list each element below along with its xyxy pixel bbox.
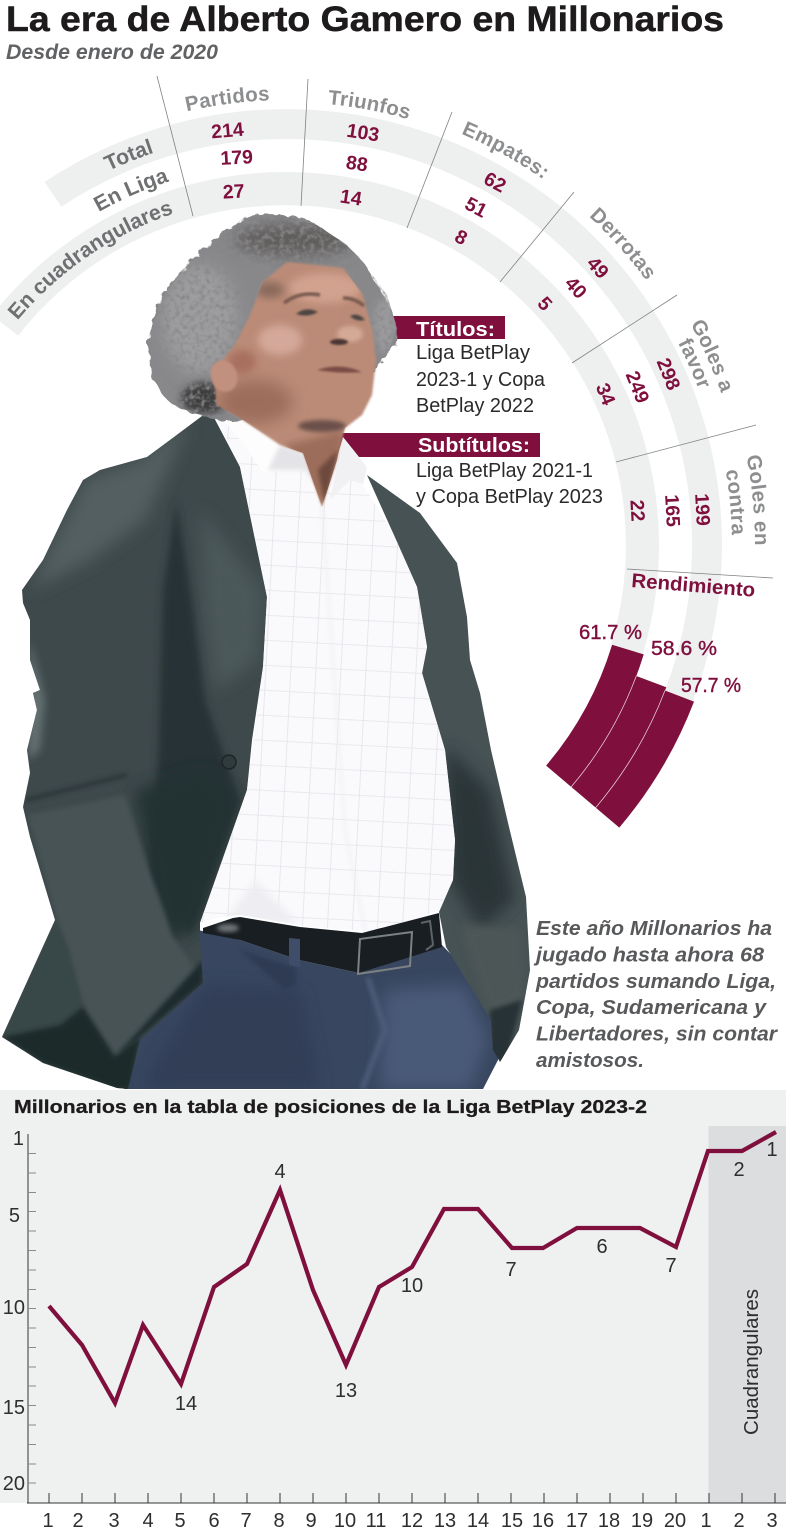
x axis labels: 13 (434, 1510, 456, 1532)
note: season matches: Libertadores, sin contar (536, 1024, 778, 1046)
values: Partidos: 179 (220, 146, 254, 170)
point labels: 6 (596, 1236, 608, 1258)
jacket: left side (0, 405, 270, 1095)
face (206, 262, 376, 507)
x axis with ticks (27, 1493, 786, 1503)
note: season matches: jugado hasta ahora 68 (533, 944, 765, 966)
x axis labels: 18 (598, 1510, 620, 1532)
x axis labels: 11 (366, 1510, 386, 1532)
x axis labels: 19 (631, 1510, 653, 1532)
heading: Títulos: Títulos: (416, 319, 495, 341)
bar: 61.7 % (546, 645, 644, 787)
point labels: 1 (766, 1139, 778, 1161)
value: 61.7 %: 61.7 % (579, 622, 642, 644)
value: 57.7 %: 57.7 % (681, 675, 741, 697)
text: titles list: BetPlay 2022 (416, 395, 534, 417)
column label: Partidos: Partidos (185, 87, 269, 111)
text: titles list: Liga BetPlay (416, 342, 530, 364)
x axis labels: 1 (700, 1510, 712, 1532)
values: Derrotas: 49 (582, 253, 613, 284)
x axis labels: 7 (240, 1510, 252, 1532)
x axis labels: 15 (501, 1510, 523, 1532)
note: season matches: Copa, Sudamericana y (536, 997, 767, 1019)
values: Triunfos: 88 (345, 152, 369, 176)
x axis labels: 10 (334, 1510, 356, 1532)
note: season matches (533, 918, 778, 1072)
position line (49, 1132, 776, 1403)
value: 58.6 %: 58.6 % (651, 638, 717, 660)
x axis labels: 1 (42, 1510, 54, 1532)
text: titles list (416, 342, 546, 417)
column label: Goles en contra: Goles en (748, 455, 766, 544)
titles heading bar (385, 316, 505, 339)
radial stats table (0, 76, 773, 838)
row label: Total: Total (102, 138, 153, 169)
values: Triunfos (338, 120, 381, 211)
y axis labels: 20 (3, 1473, 25, 1495)
x axis labels: 14 (467, 1510, 489, 1532)
panel: league position chart (0, 1090, 786, 1532)
x axis labels: 8 (273, 1510, 285, 1532)
nose (337, 326, 363, 342)
values: Goles en contra (625, 493, 714, 528)
row label: En Liga: En Liga (93, 172, 170, 212)
chart heading: Millonarios en la tabla de posiciones de la Liga BetPlay 2023-2 (14, 1096, 647, 1117)
point labels (175, 1139, 778, 1415)
y axis with ticks (28, 1134, 36, 1503)
x axis labels: 2 (72, 1510, 84, 1532)
subtitles block (416, 435, 603, 508)
ear (206, 357, 242, 395)
column label: Goles a favor: Goles a (693, 320, 730, 393)
values: Goles a favor: 249 (621, 368, 653, 407)
title: La era de Alberto Gamero en Millonarios (6, 0, 724, 39)
values: Derrotas (533, 253, 613, 315)
text: subtitles list: Liga BetPlay 2021-1 (416, 460, 593, 482)
text: subtitles list (416, 460, 603, 508)
belt (203, 913, 442, 974)
column label: Triunfos: Triunfos (329, 90, 410, 118)
chart background (0, 1090, 786, 1503)
point labels: 10 (401, 1275, 423, 1297)
x axis labels: 16 (532, 1510, 554, 1532)
text: titles list: 2023-1 y Copa (416, 369, 546, 391)
point labels: 2 (733, 1159, 745, 1181)
x axis labels: 3 (766, 1510, 778, 1532)
values: Empates: 8 (451, 225, 471, 250)
point labels: 13 (335, 1380, 357, 1402)
column label: Derrotas: Derrotas (590, 207, 654, 279)
column label: Goles en contra (726, 455, 766, 544)
x axis labels: 9 (305, 1510, 317, 1532)
note: season matches: partidos sumando Liga, (535, 971, 776, 993)
subtitle: Desde enero de 2020 (6, 40, 218, 64)
bar: 58.6 % (571, 676, 666, 808)
values: Empates: 51 (461, 193, 491, 223)
values: Goles a favor: 298 (652, 355, 684, 394)
titles block (416, 319, 546, 417)
x axis labels: 17 (566, 1510, 588, 1532)
x axis labels: 20 (664, 1510, 686, 1532)
values: Partidos: 27 (222, 180, 245, 204)
x axis labels: 12 (401, 1510, 423, 1532)
values: Goles a favor: 34 (591, 380, 619, 409)
eyes (296, 309, 365, 320)
y axis labels: 10 (3, 1297, 25, 1319)
point labels: 4 (274, 1161, 286, 1183)
column dividers (157, 76, 773, 578)
values: Empates (451, 168, 510, 250)
y axis labels: 1 (13, 1128, 24, 1150)
shirt (195, 405, 460, 940)
values: Goles a favor (591, 355, 684, 409)
y axis labels (3, 1128, 25, 1495)
values: Triunfos: 14 (338, 186, 364, 211)
bar: 57.7 % (596, 690, 694, 828)
column label: Goles en contra: contra (726, 470, 744, 536)
values: Goles en contra: 22 (625, 499, 649, 522)
eyebrows (284, 294, 364, 306)
column label: Goles a favor: favor (678, 338, 709, 386)
cuadrangulares shaded area (708, 1126, 786, 1503)
pants (124, 930, 498, 1089)
values: Empates: 62 (480, 168, 510, 198)
values: Triunfos: 103 (345, 120, 381, 147)
x axis labels: 3 (108, 1510, 120, 1532)
inner band: en cuadrangulares (0, 172, 659, 654)
x axis labels (42, 1510, 778, 1532)
y axis labels: 5 (9, 1205, 20, 1227)
note: season matches: amistosos. (536, 1050, 644, 1072)
row label: En cuadrangulares: En cuadrangulares (7, 204, 172, 320)
mouth (317, 366, 362, 373)
point labels: 7 (505, 1259, 517, 1281)
note: season matches: Este año Millonarios ha (536, 918, 772, 940)
subtitles heading bar (335, 433, 540, 457)
outer band: total (45, 109, 722, 701)
values: Partidos (210, 119, 254, 204)
x axis labels: 6 (208, 1510, 220, 1532)
heading: Subtítulos: Subtítulos: (418, 435, 530, 457)
values: Goles en contra: 199 (690, 493, 714, 527)
hair (140, 210, 405, 425)
photo: Alberto Gamero (0, 210, 535, 1095)
column label: Goles a favor (678, 320, 730, 393)
text: subtitles list: y Copa BetPlay 2023 (416, 486, 603, 508)
values: Partidos: 214 (210, 119, 245, 143)
shirt collar (228, 420, 317, 494)
x axis labels: 4 (142, 1510, 154, 1532)
values: Derrotas: 40 (560, 273, 591, 304)
label: Rendimiento: Rendimiento (631, 570, 756, 602)
performance bars (546, 645, 694, 828)
point labels: 7 (665, 1255, 677, 1277)
x axis labels: 2 (733, 1510, 745, 1532)
values: Derrotas: 5 (533, 293, 556, 315)
label: Cuadrangulares: Cuadrangulares (741, 1289, 763, 1435)
jacket: right side (360, 470, 535, 1070)
x axis labels: 5 (174, 1510, 186, 1532)
point labels: 14 (175, 1393, 197, 1415)
values: Goles en contra: 165 (660, 494, 684, 528)
column label: Empates: Empates: (462, 121, 548, 178)
y axis labels: 15 (3, 1397, 25, 1419)
